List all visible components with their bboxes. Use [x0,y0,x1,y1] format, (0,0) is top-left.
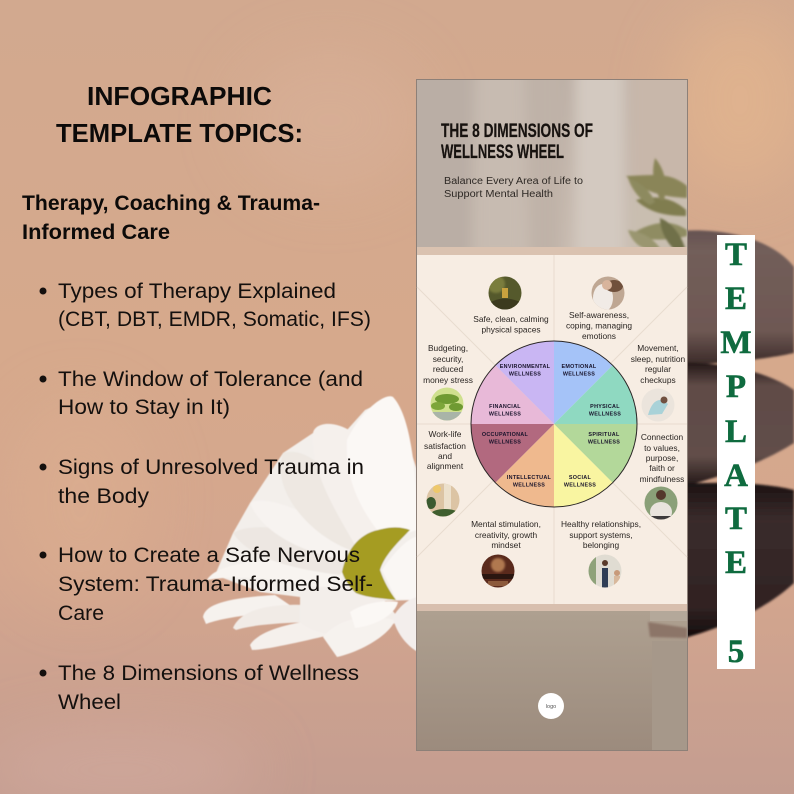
text: environmental: physical spaces [481,324,541,334]
banner: template 5: L [725,414,747,450]
text: environmental: Safe, clean, calming [473,314,549,324]
text: spiritual: purpose, [646,453,678,463]
topic: wellness wheel [40,661,359,714]
label: physical: PHYSICAL [590,404,620,410]
descriptions [423,310,686,550]
banner: template 5: M [720,325,752,361]
icon: financial photo [430,387,464,421]
main heading [56,81,303,148]
banner: template 5: T [725,501,747,537]
topic: types of therapy: (CBT, DBT, EMDR, Somatic, IFS) [58,307,371,331]
panel: header photo [417,80,687,247]
label: financial: WELLNESS [489,412,521,418]
text: financial: reduced [433,364,463,374]
topic: unresolved trauma [40,455,364,508]
label: emotional: WELLNESS [563,372,595,378]
text: financial: security, [433,354,463,364]
text: social: support systems, [569,530,633,540]
banner: template 5: E [725,281,747,317]
topic: safe nervous system [40,543,373,625]
subtitle: Balance Every Area of Life to [444,176,583,187]
text: emotional: emotions [582,331,616,341]
panel: footer photo [417,611,687,750]
panel: wellness wheel body [417,255,687,605]
title [441,121,593,163]
label: spiritual: WELLNESS [588,440,620,446]
text: spiritual: to values, [644,443,680,453]
text: financial: Budgeting, [428,343,468,353]
text: occupational: alignment [427,461,464,471]
subtitle [444,176,583,200]
label: financial: FINANCIAL [489,404,521,410]
label: emotional: EMOTIONAL [561,364,597,370]
subheading: Informed Care [22,221,170,244]
subtitle: Support Mental Health [444,189,553,200]
text: intellectual: Mental stimulation, [471,519,541,529]
topic: window of tolerance [40,367,363,419]
text: spiritual: Connection [641,432,684,442]
banner: template 5: E [725,545,747,581]
chart: wellness wheel [471,341,637,507]
text: social: Healthy relationships, [561,519,641,529]
stacked stones photo [670,230,794,642]
text: occupational: and [438,451,452,461]
topic: window of tolerance: How to Stay in It) [58,395,230,419]
text: occupational: Work-life [429,429,462,439]
label: environmental: ENVIRONMENTAL [500,364,551,370]
topic: wellness wheel: The 8 Dimensions of Wellness [58,661,359,685]
label: intellectual: INTELLECTUAL [507,475,552,481]
topic: types of therapy [40,279,371,331]
panel: template preview card [416,79,688,751]
topic: safe nervous system: Care [58,601,104,625]
banner: template 5: T [725,237,747,273]
band [417,604,687,611]
label: occupational: OCCUPATIONAL [482,432,529,438]
banner: template 5 [717,235,755,670]
label: physical: WELLNESS [589,412,621,418]
text: physical: Movement, [637,343,679,353]
text: occupational: satisfaction [424,441,466,451]
bulleted topics list [40,279,373,714]
text: intellectual: creativity, growth [475,530,537,540]
icon: environmental photo [488,276,522,310]
label: spiritual: SPIRITUAL [588,432,620,438]
subheading [22,192,320,244]
topic: window of tolerance: The Window of Tolerance (and [58,367,363,391]
text: physical: checkups [640,375,676,385]
topic: safe nervous system: How to Create a Safe Nervous [58,543,360,567]
text: physical: sleep, nutrition [631,354,686,364]
logo badge [538,693,564,719]
logo badge: logo [546,704,556,710]
banner: template 5: P [726,369,746,405]
label: intellectual: WELLNESS [513,482,545,488]
topic: safe nervous system: System: Trauma-Informed Self- [58,572,373,596]
text: spiritual: faith or [649,463,675,473]
icon: occupational photo [426,484,460,516]
icon: emotional photo [592,276,624,310]
text: spiritual: mindfulness [640,474,684,484]
title: WELLNESS WHEEL [441,142,564,163]
banner: template 5: 5 [728,634,744,670]
band [417,247,687,255]
icon: social photo [588,554,622,588]
icon: physical photo [641,388,675,422]
title: THE 8 DIMENSIONS OF [441,121,593,142]
label: environmental: WELLNESS [509,372,541,378]
topic: wellness wheel: Wheel [58,690,121,714]
icon: intellectual photo [481,554,515,588]
text: intellectual: mindset [491,540,521,550]
text: social: belonging [583,540,620,550]
main heading: INFOGRAPHIC [87,81,272,111]
text: financial: money stress [423,375,473,385]
banner: template 5: A [724,458,748,494]
main heading: TEMPLATE TOPICS: [56,118,303,148]
topic: unresolved trauma: Signs of Unresolved Trauma in [58,455,364,479]
icon: plant [626,158,687,250]
text: physical: regular [645,364,671,374]
topic: unresolved trauma: the Body [58,484,149,508]
text: emotional: coping, managing [566,320,632,330]
topic: types of therapy: Types of Therapy Explained [58,279,336,303]
label: occupational: WELLNESS [489,440,521,446]
daisy flower photo [203,396,418,657]
text: emotional: Self-awareness, [569,310,629,320]
icon: spiritual photo [644,486,678,520]
label: social: WELLNESS [564,482,596,488]
label: social: SOCIAL [569,475,591,481]
subheading: Therapy, Coaching & Trauma- [22,192,320,215]
